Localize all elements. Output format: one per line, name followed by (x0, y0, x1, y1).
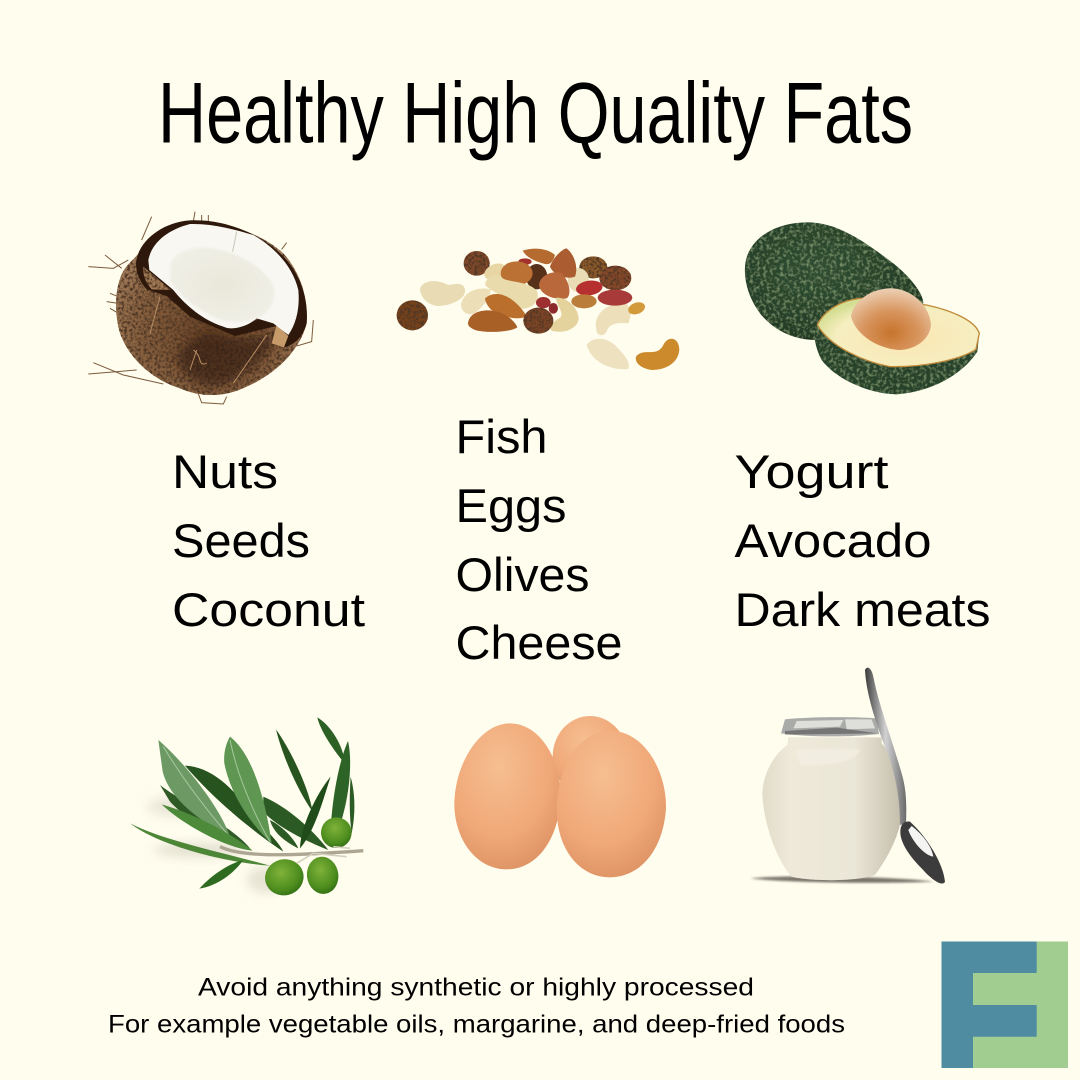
list item: Cheese (456, 616, 622, 669)
logo: letter F (942, 942, 1068, 1068)
almonds (485, 294, 527, 318)
list item: Dark meats (734, 583, 990, 636)
icon: mixed nuts (397, 248, 679, 370)
icon: coconut (88, 212, 313, 404)
spoon (865, 668, 906, 825)
list item: Coconut (172, 583, 365, 636)
foil lid (781, 717, 879, 736)
list item: Nuts (172, 445, 278, 498)
list item: Avocado (734, 514, 932, 567)
jar shadow (750, 876, 933, 883)
stem (220, 847, 363, 855)
pit (851, 288, 931, 350)
olives (321, 817, 352, 848)
list item: Yogurt (734, 445, 888, 498)
footer note (108, 974, 845, 1038)
acorn-shaped hazelnuts (550, 248, 576, 278)
list item: Olives (456, 548, 590, 601)
icon: yogurt jar with spoon (750, 668, 945, 884)
whole avocado (745, 222, 923, 340)
third column list (734, 445, 990, 636)
list item: Seeds (172, 514, 310, 567)
icon: olive branch (130, 717, 363, 900)
cashews (420, 281, 465, 306)
footer line 1: Avoid anything synthetic or highly processed (198, 974, 754, 1002)
hazelnut (523, 308, 553, 334)
list item: Eggs (456, 479, 566, 532)
peanuts (536, 297, 551, 308)
icon: avocado (745, 222, 979, 394)
cut half flesh (817, 298, 979, 367)
first column list (172, 445, 365, 636)
footer line 2: For example vegetable oils, margarine, and deep-fried foods (108, 1010, 845, 1038)
cut half skin (814, 298, 979, 394)
jar highlight (795, 749, 860, 765)
left egg (454, 723, 561, 869)
leaves (160, 785, 250, 848)
back egg (553, 716, 627, 797)
hazelnut loose left (397, 300, 428, 330)
jar body (762, 737, 903, 880)
front egg (557, 731, 666, 877)
list item: Fish (456, 410, 548, 463)
icon: eggs (454, 716, 666, 877)
second column list (456, 410, 622, 669)
back nuts (464, 251, 490, 276)
